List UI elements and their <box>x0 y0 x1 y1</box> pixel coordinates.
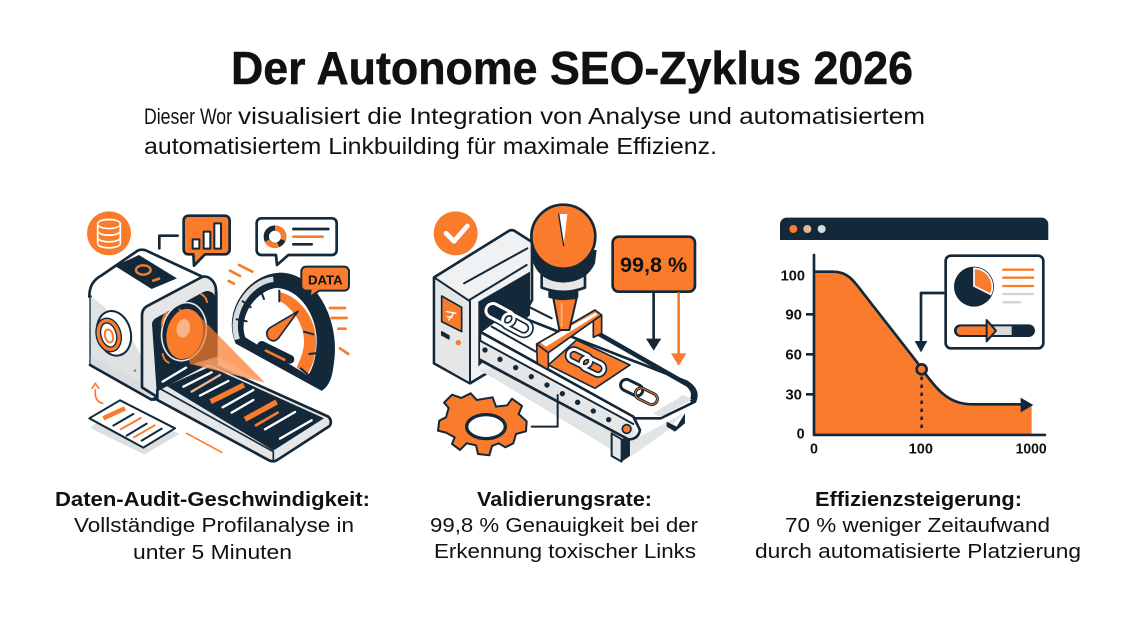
icon: speedometer gauge <box>229 265 348 389</box>
callout: 99,8 %: 99,8 % <box>620 253 687 277</box>
caption: validation <box>430 489 698 563</box>
icon: validation machine <box>434 230 532 383</box>
icon: DATA tag: DATA <box>308 272 343 287</box>
panel: validation illustration <box>434 205 696 462</box>
side rail <box>480 332 640 439</box>
axis labels <box>781 268 1047 458</box>
caption: efficiency <box>755 489 1081 563</box>
icon: database badge <box>87 211 131 255</box>
icon: chain links <box>483 301 659 407</box>
caption: efficiency: durch automatisierte Platzierung <box>755 540 1081 563</box>
belt surface <box>480 312 696 418</box>
icon: DATA tag <box>301 267 349 297</box>
caption: efficiency: 70 % weniger Zeitaufwand <box>785 514 1050 537</box>
caption: validation: Validierungsrate: <box>477 489 652 511</box>
shadow under belt <box>478 368 683 457</box>
intro text <box>144 103 925 159</box>
icon: bar chart speech bubble <box>159 216 230 266</box>
caption: data audit <box>55 489 370 564</box>
axis labels: 30 <box>785 388 802 404</box>
callout: 99,8 % <box>613 237 695 292</box>
intro text: automatisiertem Linkbuilding für maximale Effizienz. <box>144 133 717 159</box>
icon: check badge <box>434 211 478 255</box>
caption: efficiency: Effizienzsteigerung: <box>815 489 1022 511</box>
caption: validation: 99,8 % Genauigkeit bei der <box>430 514 698 537</box>
area chart <box>806 255 1045 435</box>
icon: gear <box>438 393 558 455</box>
title: Der Autonome SEO-Zyklus 2026 <box>231 42 913 94</box>
arrow: dark down <box>646 292 661 351</box>
icon: orange scan beam <box>162 305 265 383</box>
caption: data audit: Daten-Audit-Geschwindigkeit: <box>55 489 370 511</box>
arrow: orange down <box>671 293 686 366</box>
panel: efficiency chart <box>780 218 1048 458</box>
icon: conveyor belt <box>157 363 331 461</box>
icon: report sheet <box>89 383 222 455</box>
axis labels: 90 <box>785 308 802 324</box>
axis labels: 100 <box>909 442 933 458</box>
axis labels: 0 <box>810 442 818 458</box>
icon: donut chart speech bubble <box>257 218 337 265</box>
axis labels: 1000 <box>1016 442 1047 458</box>
axis labels: 0 <box>797 426 805 442</box>
chart: conveyor belt <box>478 296 696 462</box>
intro text: visualisiert die Integration von Analyse und automatisiertem <box>238 103 925 129</box>
arrow: card to point <box>915 293 943 352</box>
caption: validation: Erkennung toxischer Links <box>434 540 696 563</box>
caption: data audit: Vollständige Profilanalyse in <box>74 514 354 537</box>
panel: data audit illustration <box>87 211 349 461</box>
axis labels: 100 <box>781 268 805 284</box>
icon: orange frame <box>537 310 602 370</box>
intro text: Dieser Wor <box>144 104 232 129</box>
inset dashboard card <box>946 256 1043 348</box>
icon: laser head <box>531 205 597 330</box>
icon: scanner machine <box>89 250 216 400</box>
legs <box>612 433 622 462</box>
axis labels: 60 <box>785 348 802 364</box>
caption: data audit: unter 5 Minuten <box>133 541 292 564</box>
browser bar <box>780 218 1048 240</box>
